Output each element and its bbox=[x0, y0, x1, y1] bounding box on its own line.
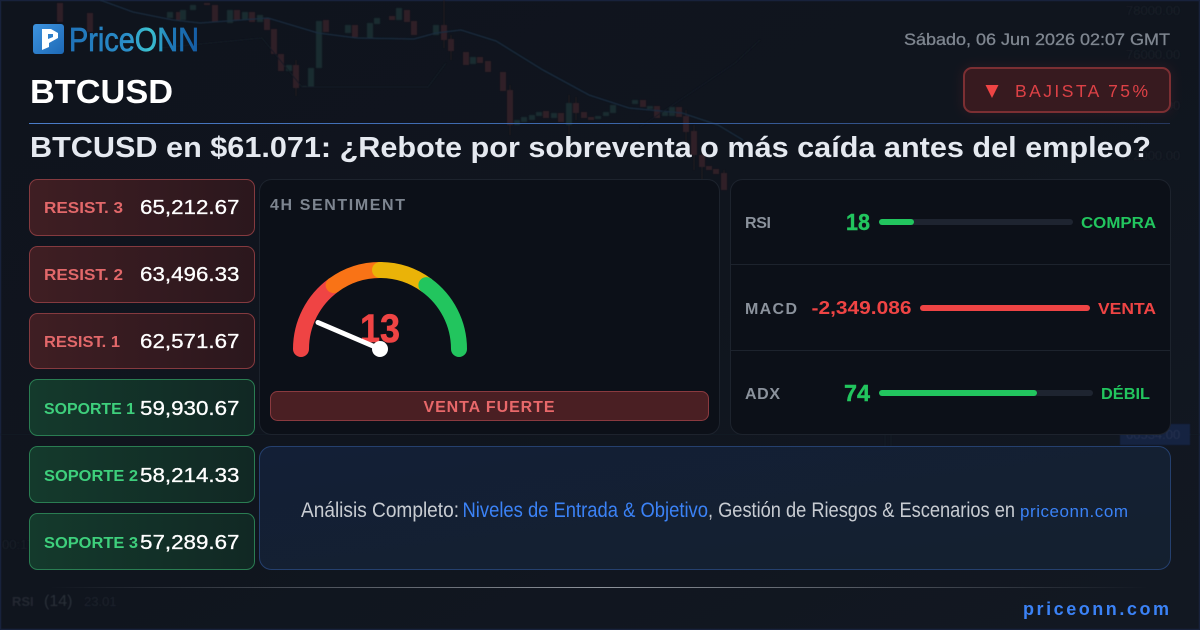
level: support 3: SOPORTE 3 bbox=[44, 535, 138, 552]
level: resistance 2: RESIST. 2 bbox=[44, 267, 123, 284]
level: resistance 2 bbox=[30, 246, 254, 302]
background: faint candlestick chart: RSI bbox=[12, 594, 34, 609]
indicator: RSI: RSI bbox=[745, 215, 771, 232]
sentiment verdict bbox=[270, 392, 708, 420]
indicator: MACD bbox=[745, 297, 1156, 318]
logo: PriceONN bbox=[33, 22, 199, 59]
icon: down triangle bbox=[986, 85, 998, 98]
headline: BTCUSD en $61.071: ¿Rebote por sobreventa o más caída antes del empleo? bbox=[30, 132, 1151, 164]
background: faint candlestick chart: 72000.00 bbox=[1126, 148, 1180, 163]
indicator: MACD: VENTA bbox=[1098, 301, 1156, 318]
logo wordmark: PriceONN bbox=[69, 22, 199, 59]
call to action text bbox=[301, 499, 1128, 522]
level: resistance 1: RESIST. 1 bbox=[44, 334, 120, 351]
level: support 1: SOPORTE 1 bbox=[44, 401, 135, 418]
level: support 3 bbox=[30, 514, 254, 570]
indicator: ADX bbox=[745, 380, 1150, 406]
divider rule bbox=[29, 123, 1170, 124]
level: support 2 bbox=[30, 446, 254, 502]
sentiment heading: 4H SENTIMENT bbox=[270, 197, 405, 214]
background: faint candlestick chart: (14) bbox=[44, 593, 72, 610]
background: faint candlestick chart: 76000.00 bbox=[1126, 47, 1180, 62]
panel: indicators bbox=[730, 180, 1170, 434]
footer rule bbox=[50, 587, 1150, 588]
level: resistance 3: RESIST. 3 bbox=[44, 200, 123, 217]
sentiment verdict: VENTA FUERTE bbox=[424, 399, 555, 416]
level: resistance 1: 62,571.67 bbox=[140, 330, 240, 353]
indicator: RSI bbox=[745, 209, 1156, 235]
panel: 4H sentiment bbox=[260, 180, 720, 434]
level: support 3: 57,289.67 bbox=[140, 531, 240, 554]
gauge needle bbox=[318, 322, 388, 357]
indicator: RSI: COMPRA bbox=[1081, 215, 1156, 232]
level: resistance 1 bbox=[30, 314, 254, 368]
indicator: MACD: -2,349.086 bbox=[812, 297, 912, 318]
background: faint candlestick chart: 78000.00 bbox=[1126, 3, 1180, 18]
level: resistance 3: 65,212.67 bbox=[140, 196, 240, 219]
call to action text: priceonn.com bbox=[1020, 502, 1128, 521]
call to action text: Niveles de Entrada & Objetivo bbox=[462, 499, 708, 522]
level: support 1 bbox=[30, 380, 254, 436]
panel: call to action bbox=[260, 446, 1170, 570]
level: support 2: 58,214.33 bbox=[140, 464, 240, 487]
background: faint candlestick chart: 00:17 bbox=[2, 537, 35, 552]
icon: logo P mark bbox=[33, 24, 64, 54]
panel: support and resistance levels bbox=[30, 180, 254, 570]
level: support 2: SOPORTE 2 bbox=[44, 468, 138, 485]
badge: bearish 75% bbox=[962, 66, 1172, 114]
background: faint candlestick chart: 60534.00 bbox=[1126, 427, 1180, 442]
call to action text: Análisis Completo: bbox=[301, 499, 459, 522]
symbol heading: BTCUSD bbox=[30, 74, 173, 111]
indicator: ADX: ADX bbox=[745, 386, 780, 403]
date and time: Sábado, 06 Jun 2026 02:07 GMT bbox=[904, 31, 1170, 49]
indicator: ADX: DÉBIL bbox=[1101, 384, 1150, 403]
gauge value: 13 bbox=[360, 307, 400, 351]
badge: bearish 75%: BAJISTA 75% bbox=[1015, 81, 1150, 101]
level: resistance 3 bbox=[30, 180, 254, 236]
background: faint candlestick chart: 74000.00 bbox=[1126, 98, 1180, 113]
level: resistance 2: 63,496.33 bbox=[140, 263, 240, 286]
level: support 1: 59,930.67 bbox=[140, 397, 240, 420]
call to action text: , Gestión de Riesgos & Escenarios en bbox=[708, 499, 1015, 522]
background: faint candlestick chart: 23.01 bbox=[84, 594, 117, 609]
indicator: MACD: MACD bbox=[745, 301, 797, 318]
indicator: RSI: 18 bbox=[846, 209, 870, 235]
indicator: ADX: 74 bbox=[844, 380, 870, 406]
gauge chart bbox=[301, 270, 459, 357]
footer site link: priceonn.com bbox=[1023, 599, 1169, 619]
